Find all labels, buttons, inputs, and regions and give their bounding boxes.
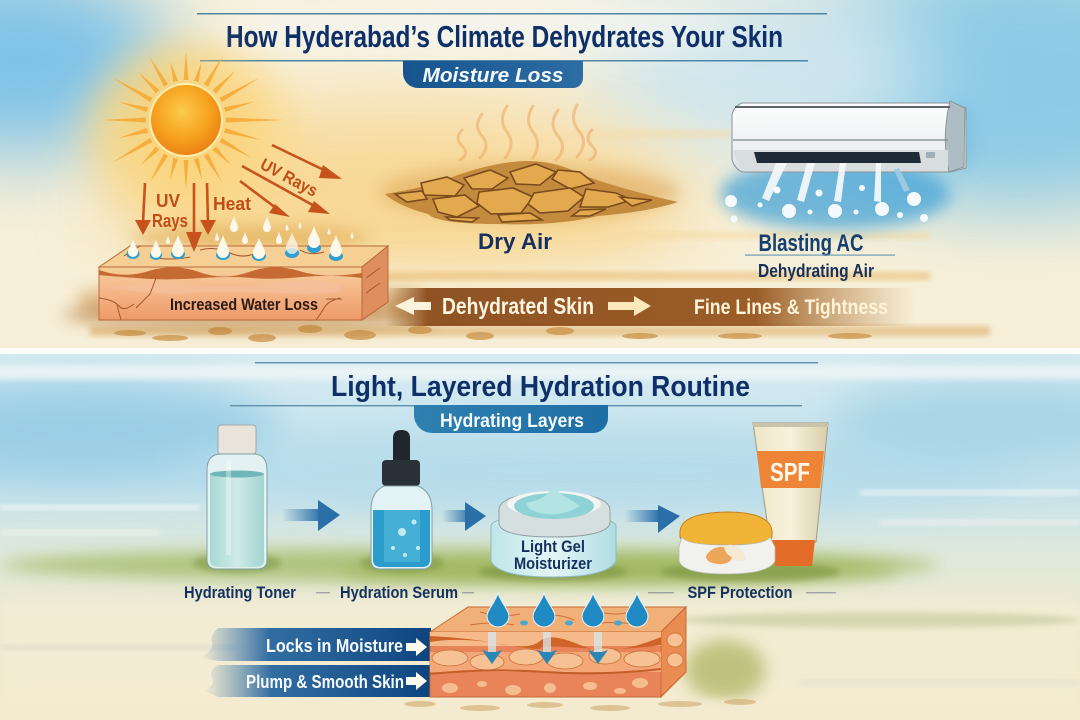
label: UV rays (diagonal): UV Rays bbox=[257, 155, 321, 201]
divider between panels bbox=[0, 348, 1080, 354]
band: plump and smooth skin bbox=[204, 665, 431, 697]
illustration: cracked dry earth bbox=[380, 161, 680, 224]
tag: moisture loss bbox=[403, 61, 583, 88]
sub-label rule bbox=[745, 254, 895, 256]
water drops evaporating bbox=[126, 216, 354, 261]
arrow: serum to moisturizer bbox=[442, 502, 486, 531]
label bands: benefits bbox=[200, 628, 431, 697]
icon: hydration serum dropper bbox=[360, 430, 444, 573]
icon: hydrating toner bottle bbox=[193, 425, 281, 573]
label: hydration serum: Hydration Serum bbox=[340, 583, 458, 602]
icon: water drops bbox=[487, 593, 648, 627]
band: plump and smooth skin: Plump & Smooth Skin bbox=[246, 672, 404, 692]
label: increased water loss: Increased Water Loss bbox=[170, 295, 318, 314]
tag: moisture loss: Moisture Loss bbox=[422, 65, 564, 87]
label: light gel moisturizer: Moisturizer bbox=[514, 554, 592, 573]
label: SPF: SPF bbox=[770, 457, 810, 487]
arrows: UV rays and heat bbox=[135, 145, 342, 252]
panel background: sky and meadow bbox=[0, 354, 1080, 720]
heading group bbox=[197, 13, 827, 88]
title rule top bbox=[255, 362, 818, 363]
icon: SPF tube and cream jar bbox=[660, 423, 840, 582]
heading group bbox=[230, 362, 818, 433]
panel: hydration routine bbox=[0, 354, 1080, 720]
icon: heat waves bbox=[458, 105, 596, 160]
label: heat: Heat bbox=[213, 194, 251, 214]
arrow: toner to serum bbox=[282, 500, 340, 531]
tag: hydrating layers: Hydrating Layers bbox=[440, 411, 584, 432]
label: light gel moisturizer: Light Gel bbox=[521, 537, 585, 556]
title rule top bbox=[197, 13, 827, 14]
brown ground band bbox=[385, 288, 915, 326]
label: UV rays (left): UV bbox=[156, 191, 180, 211]
title: How Hyderabad’s Climate Dehydrates Your Skin bbox=[226, 19, 783, 54]
label: SPF protection: SPF Protection bbox=[688, 583, 792, 602]
arrow: toward skin block bbox=[395, 297, 431, 315]
icon: sun with rays bbox=[102, 48, 284, 192]
illustration: hydrated skin block bbox=[430, 593, 686, 697]
title rule bottom bbox=[230, 405, 802, 406]
label: UV rays (left): Rays bbox=[152, 211, 188, 231]
arrows: moisture moving down bbox=[482, 632, 608, 664]
label: dehydrating air: Dehydrating Air bbox=[758, 261, 874, 281]
tag: hydrating layers bbox=[414, 405, 608, 433]
band: locks in moisture: Locks in Moisture bbox=[266, 636, 403, 656]
band: locks in moisture bbox=[200, 628, 431, 661]
arrow: toward fine lines bbox=[608, 296, 651, 316]
title rule bottom bbox=[200, 60, 808, 62]
label: dehydrated skin: Dehydrated Skin bbox=[442, 293, 594, 319]
panel background: sky and sand bbox=[0, 0, 1080, 360]
label: UV rays (left) bbox=[153, 194, 188, 231]
label: light gel moisturizer bbox=[514, 540, 592, 569]
illustration: cracked skin block bbox=[60, 216, 440, 329]
label: dry air: Dry Air bbox=[478, 229, 552, 254]
label: fine lines and tightness: Fine Lines & Tightness bbox=[694, 296, 888, 319]
label: hydrating toner: Hydrating Toner bbox=[184, 583, 296, 602]
title: Light, Layered Hydration Routine bbox=[331, 371, 750, 403]
panel: moisture loss (climate causes) bbox=[0, 0, 1080, 360]
arrow: moisturizer to SPF bbox=[625, 505, 680, 533]
illustration: air conditioner blowing cold air bbox=[720, 100, 978, 230]
label: blasting AC: Blasting AC bbox=[758, 230, 864, 257]
icon: light gel moisturizer jar bbox=[478, 484, 628, 581]
